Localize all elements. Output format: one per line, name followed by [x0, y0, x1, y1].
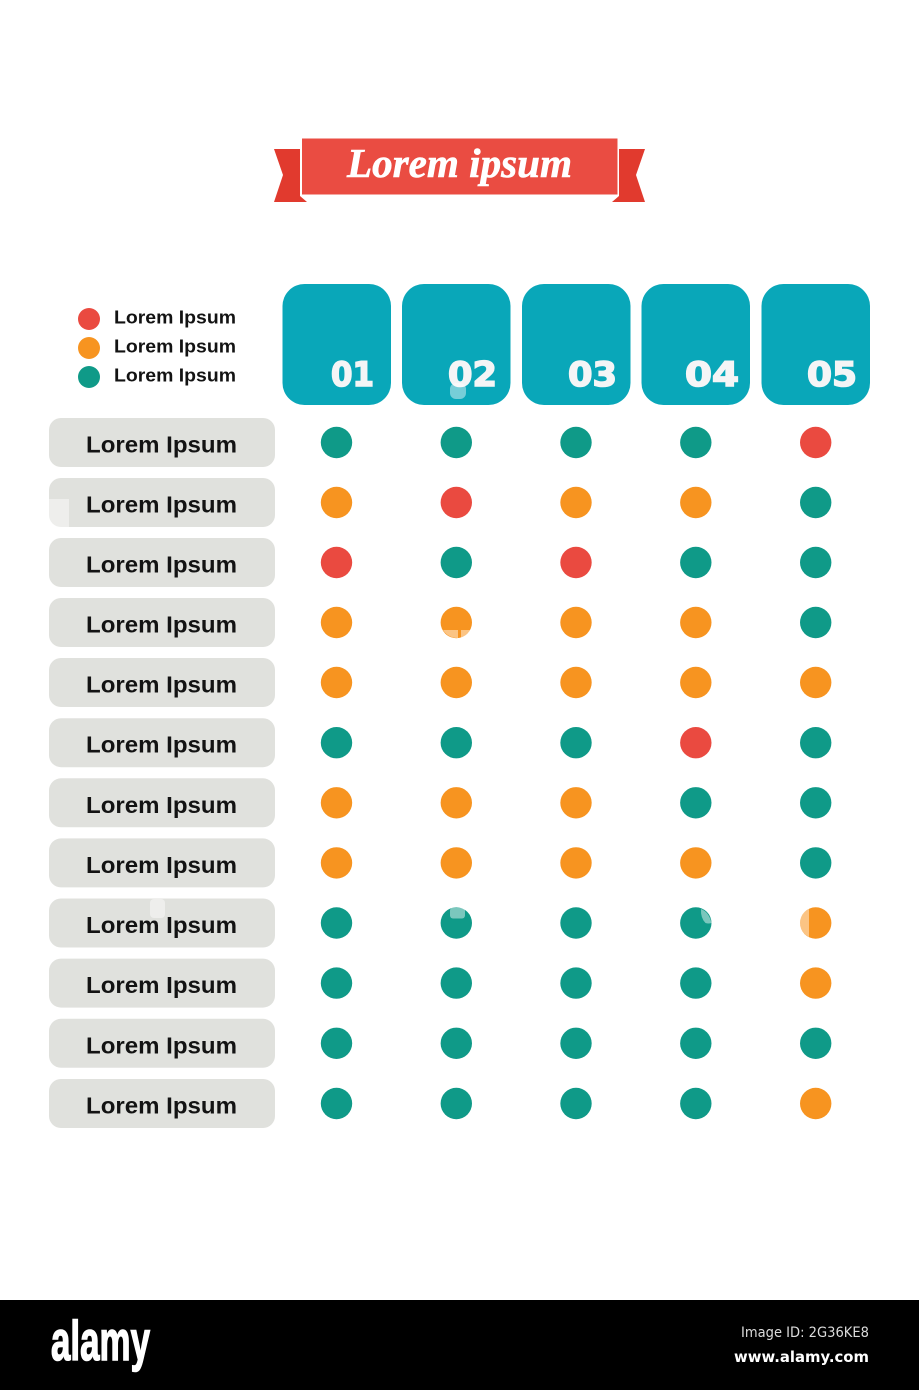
column header 04: 04: [685, 355, 739, 395]
column header 03: [522, 284, 630, 405]
column header 02: 02: [448, 355, 497, 395]
footer bar: alamy: [51, 1309, 150, 1372]
row 8: Lorem Ipsum: [86, 852, 237, 878]
footer bar: www.alamy.com: [734, 1348, 869, 1366]
row 8: [49, 838, 831, 887]
row 4: [49, 598, 831, 647]
row 12: Lorem Ipsum: [86, 1092, 237, 1118]
column header 04: [642, 284, 750, 405]
title ribbon: Lorem ipsum: [346, 140, 572, 186]
column header 02: [402, 284, 510, 405]
row 5: [49, 658, 831, 707]
row 9: [49, 898, 831, 948]
row 7: Lorem Ipsum: [86, 792, 237, 818]
column header 03: 03: [568, 355, 617, 395]
row 4: Lorem Ipsum: [86, 612, 237, 638]
row 7: [49, 778, 831, 827]
legend: Lorem Ipsum: [114, 364, 236, 386]
row 3: [49, 538, 831, 587]
row 10: [49, 959, 831, 1008]
row 11: Lorem Ipsum: [86, 1032, 237, 1058]
footer bar: Image ID: 2G36KE8: [741, 1325, 869, 1341]
column header 01: 01: [331, 355, 374, 395]
row 2: Lorem Ipsum: [86, 492, 237, 518]
legend: [78, 306, 236, 388]
row 10: Lorem Ipsum: [86, 972, 237, 998]
row 6: [49, 718, 831, 767]
row 11: [49, 1019, 831, 1068]
footer bar: [0, 1300, 919, 1390]
row 3: Lorem Ipsum: [86, 552, 237, 578]
column header 01: [282, 284, 391, 405]
column header 05: [762, 284, 870, 405]
row 1: [49, 418, 831, 467]
row 12: [49, 1079, 831, 1128]
row 9: Lorem Ipsum: [86, 912, 237, 938]
legend: Lorem Ipsum: [114, 306, 236, 328]
column header 05: 05: [807, 355, 857, 395]
row 5: Lorem Ipsum: [86, 672, 237, 698]
legend: Lorem Ipsum: [114, 336, 236, 356]
row 6: Lorem Ipsum: [86, 732, 237, 758]
row 2: [49, 478, 831, 527]
title ribbon: [274, 138, 645, 202]
row 1: Lorem Ipsum: [86, 432, 237, 458]
